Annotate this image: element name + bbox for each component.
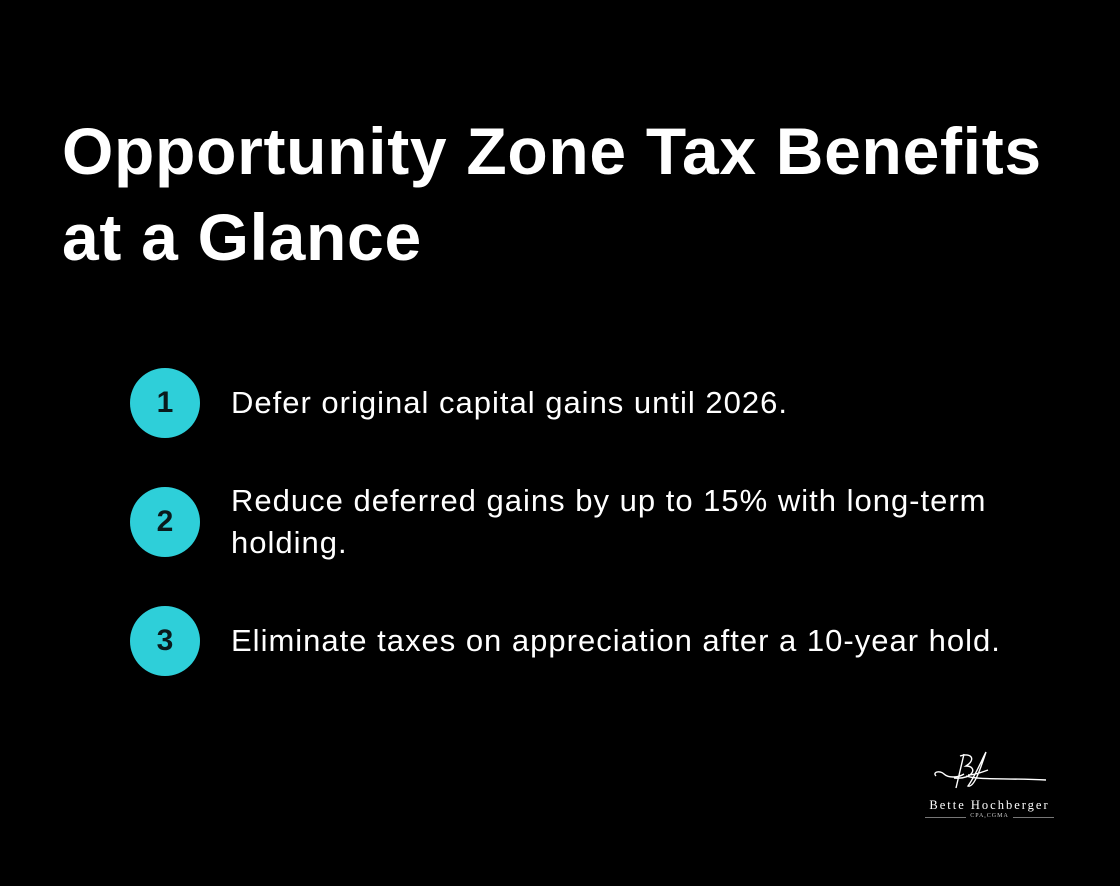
logo name: Bette Hochberger (929, 798, 1050, 812)
item 2 (130, 483, 987, 560)
item 1 (130, 368, 788, 438)
title (62, 114, 1042, 274)
text 1: Defer original capital gains until 2026. (231, 385, 788, 420)
text 2 (231, 483, 987, 560)
badge 1: 1 (157, 386, 173, 419)
badge 2: 2 (157, 505, 173, 538)
badge 1 (130, 368, 200, 438)
logo: CPA,CGMA (970, 813, 1009, 819)
text 2: Reduce deferred gains by up to 15% with long-term (231, 483, 987, 518)
logo monogram (934, 752, 1046, 788)
badge 3 (130, 606, 200, 676)
title: at a Glance (62, 200, 422, 274)
badge 3: 3 (157, 624, 173, 657)
badge 2 (130, 487, 200, 557)
text 3: Eliminate taxes on appreciation after a 10-year hold. (231, 623, 1001, 658)
logo (925, 752, 1054, 819)
text 2: holding. (231, 525, 348, 560)
item 3 (130, 606, 1001, 676)
title: Opportunity Zone Tax Benefits (62, 114, 1042, 188)
